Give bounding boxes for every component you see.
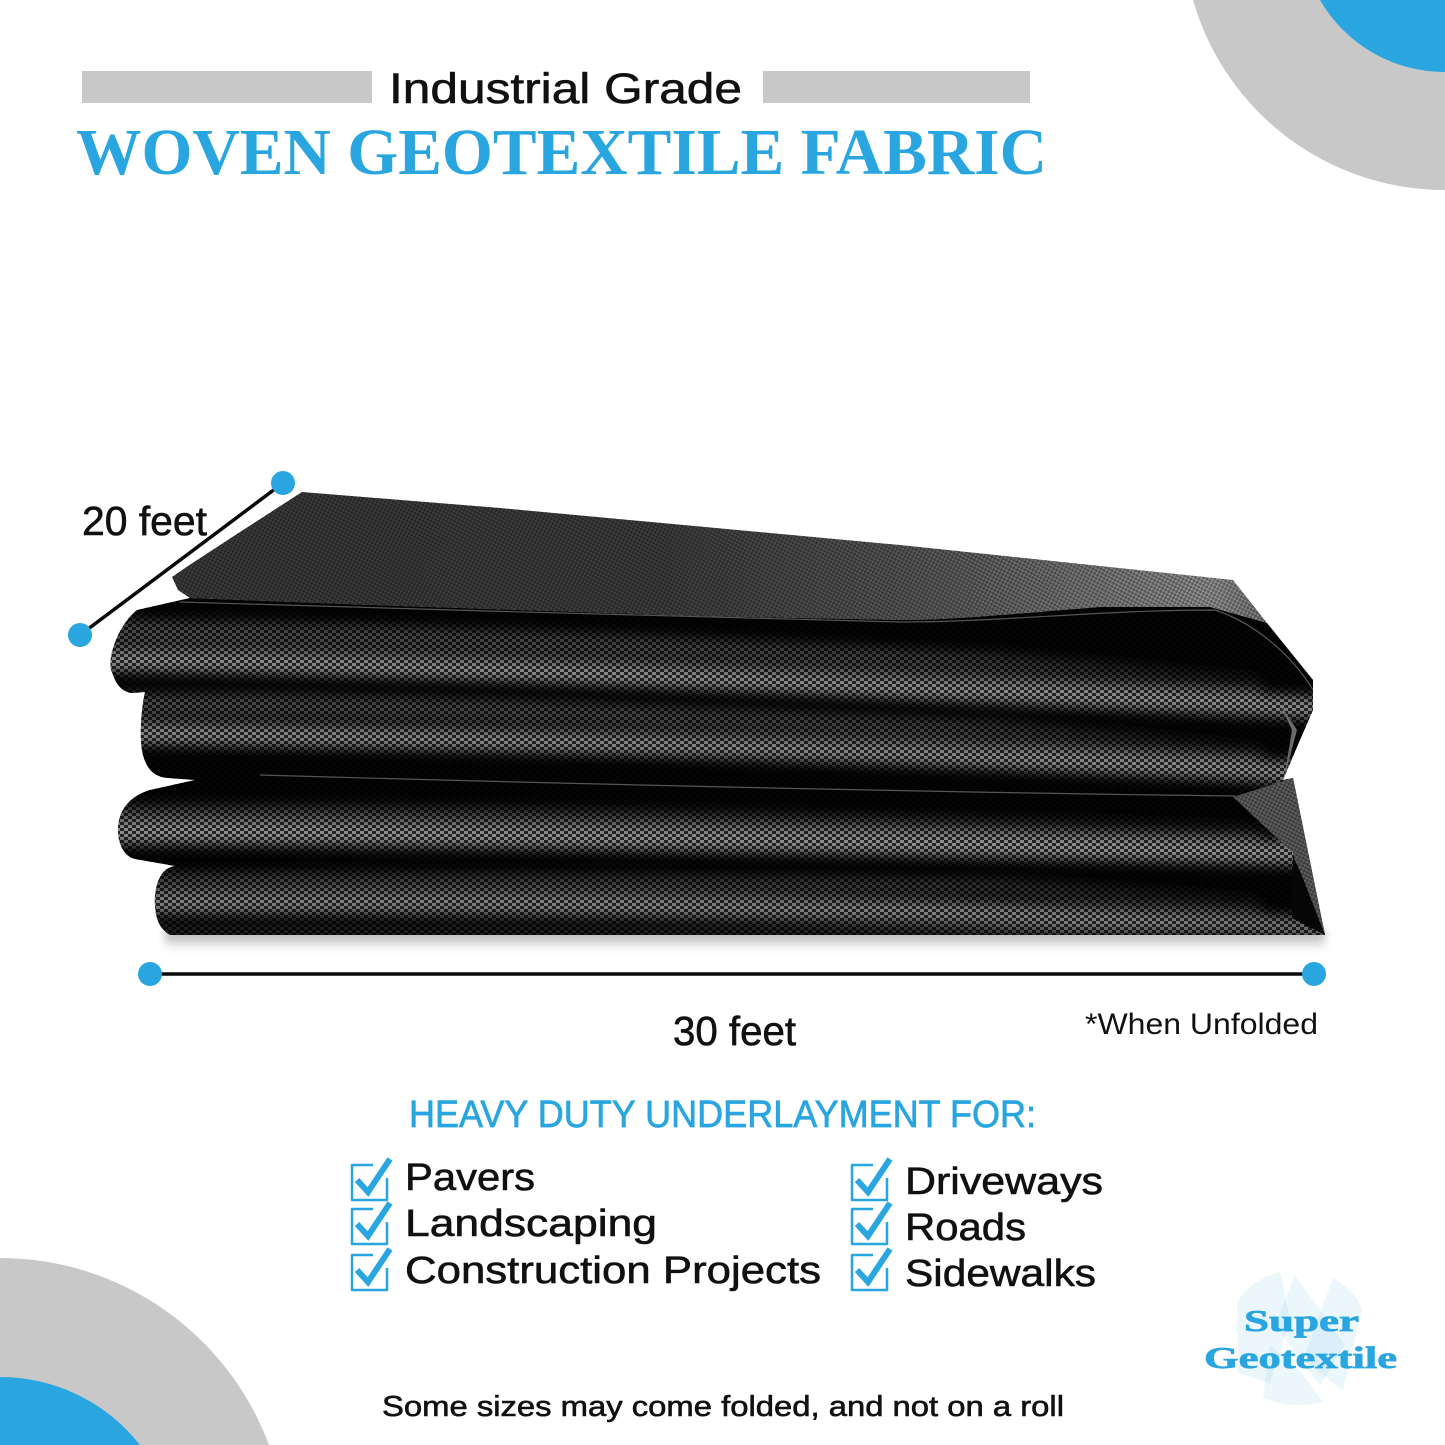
item: Construction Projects: Construction Projects xyxy=(405,1250,821,1292)
label: 20 feet: 20 feet xyxy=(82,498,208,544)
folds body xyxy=(90,590,1340,940)
logo: Super Geotextile xyxy=(1204,1272,1397,1405)
weave texture xyxy=(100,590,1340,940)
note: when unfolded: *When Unfolded xyxy=(1085,1008,1318,1041)
corner decoration: top right xyxy=(1193,0,1445,190)
footnote: Some sizes may come folded, and not on a roll xyxy=(382,1391,1064,1423)
item: Pavers: Pavers xyxy=(405,1157,535,1199)
check icon: roads xyxy=(852,1203,890,1244)
right triangle xyxy=(1233,778,1325,935)
black wedge xyxy=(1292,855,1325,935)
corner decoration: bottom left xyxy=(0,1258,269,1445)
label: 30 feet: 30 feet xyxy=(673,1008,797,1054)
top sheet xyxy=(172,492,1267,623)
item: Sidewalks: Sidewalks xyxy=(905,1253,1096,1295)
check icon: construction projects xyxy=(352,1249,390,1290)
check icon: sidewalks xyxy=(852,1249,890,1290)
check icon: landscaping xyxy=(352,1203,390,1244)
eyebrow: Industrial Grade: Industrial Grade xyxy=(389,65,742,113)
heading rule right xyxy=(763,71,1030,103)
heading rule left xyxy=(82,71,372,103)
item: Driveways: Driveways xyxy=(905,1161,1103,1203)
item: Roads: Roads xyxy=(905,1207,1026,1249)
logo mark xyxy=(1237,1272,1362,1405)
logo: Super Geotextile: Geotextile xyxy=(1204,1340,1397,1375)
photo: folded black geotextile fabric xyxy=(90,492,1340,950)
seam lines xyxy=(260,775,1235,796)
section heading: HEAVY DUTY UNDERLAYMENT FOR: xyxy=(409,1094,1036,1136)
right fold strip xyxy=(1280,704,1297,779)
checklist: right column xyxy=(852,1159,1103,1295)
ground shadow xyxy=(165,930,1325,950)
main title: WOVEN GEOTEXTILE FABRIC xyxy=(76,116,1047,189)
dimension line: 30 feet xyxy=(138,962,1326,986)
black base xyxy=(100,590,1340,940)
item: Landscaping: Landscaping xyxy=(405,1203,657,1245)
dimension line: 20 feet xyxy=(68,471,295,647)
fold highlights xyxy=(90,632,1340,934)
check icon: pavers xyxy=(352,1159,390,1200)
logo wordmark: Super xyxy=(1244,1303,1359,1338)
checklist: left column xyxy=(352,1157,821,1292)
title block xyxy=(76,65,1047,189)
check icon: driveways xyxy=(852,1159,890,1200)
